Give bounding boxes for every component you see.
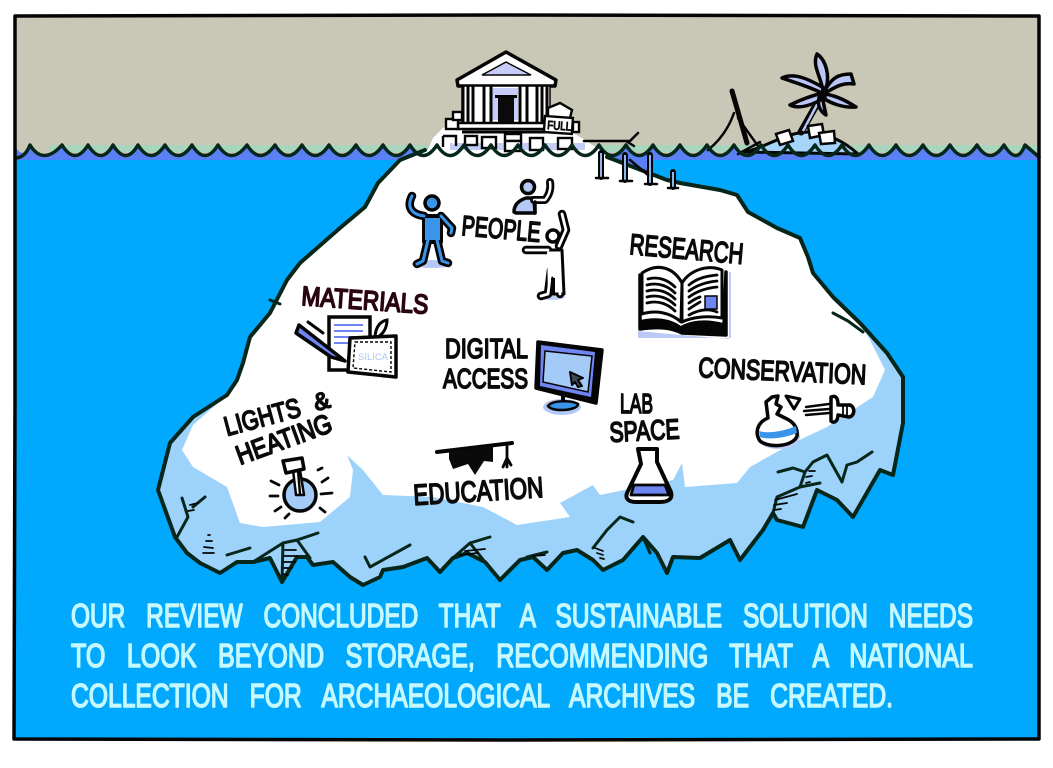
lab space heading: LAB [620, 388, 653, 419]
icon: graduation cap [437, 443, 512, 475]
education heading: EDUCATION [412, 472, 544, 512]
sea [15, 160, 1039, 739]
boxes piled around museum [443, 103, 579, 151]
iceberg base [158, 150, 903, 585]
museum building [457, 52, 556, 132]
lab space heading: SPACE [609, 413, 680, 448]
icon: light bulb [270, 458, 332, 518]
conservation heading: CONSERVATION [698, 352, 867, 390]
icon: paper, pen and silica bag [296, 317, 396, 377]
shadow under temple [450, 143, 585, 150]
research heading: RESEARCH [628, 229, 745, 271]
icon: paper, pen and silica bag: SILICA [358, 352, 388, 362]
people heading: PEOPLE [460, 210, 542, 248]
tinted water behind dock [607, 155, 653, 175]
ruined dock [584, 133, 678, 188]
lights and heating heading [221, 387, 336, 471]
digital access heading: ACCESS [443, 363, 528, 394]
distant island with palm tree [745, 54, 858, 154]
icon: waving person behind [514, 180, 550, 213]
green tint at the waterline [50, 145, 1039, 152]
waves [15, 145, 1039, 158]
icon: broken flask and syringe [756, 396, 854, 449]
digital access heading [443, 333, 528, 394]
lights and heating heading: & [311, 387, 333, 417]
tinted water band below waves [15, 146, 1039, 170]
digital access heading: DIGITAL [445, 333, 528, 364]
iceberg sunlit top [182, 150, 885, 527]
materials heading: MATERIALS [301, 281, 429, 320]
temple island [427, 125, 600, 160]
icon: standing blue person [410, 196, 452, 268]
full label box: FULL [547, 118, 572, 134]
sunken ship mast [708, 91, 760, 154]
icon: pointing white person [526, 214, 566, 300]
sky panel [15, 16, 1039, 158]
icon: lab flask [626, 449, 671, 502]
icon: open book [638, 267, 731, 339]
lights and heating heading: LIGHTS [221, 393, 304, 442]
iceberg outline [158, 150, 903, 585]
conclusion text [71, 597, 973, 714]
lab space heading [609, 388, 680, 448]
iceberg cracks [177, 300, 872, 582]
lights and heating heading: HEATING [232, 408, 336, 471]
icon: computer monitor [536, 342, 602, 415]
